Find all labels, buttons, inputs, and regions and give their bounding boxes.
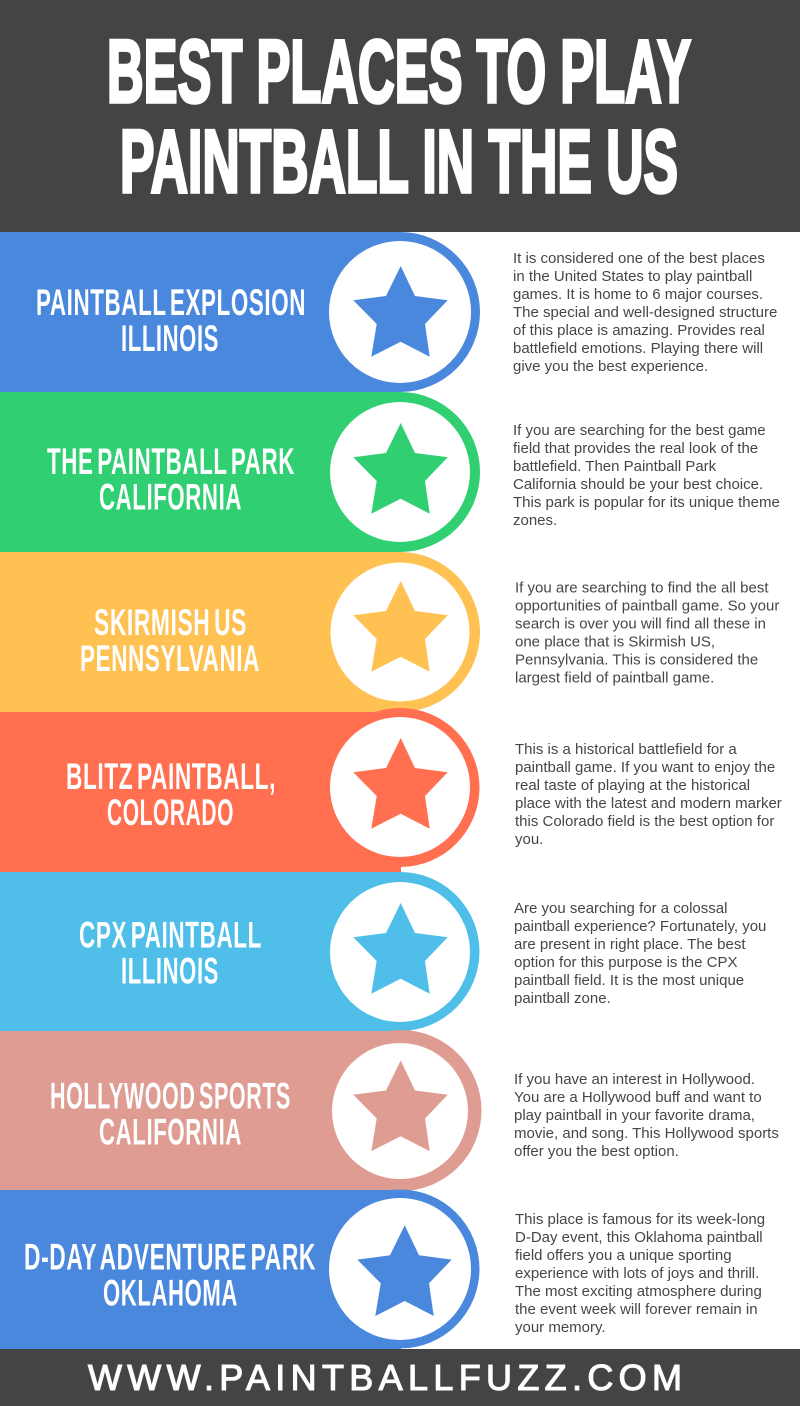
panel: CPX Paintball Illinois: option for this purpose is the CPX [514,954,737,971]
panel: Paintball Explosion Illinois: ILLINOIS [121,318,219,359]
panel: Hollywood Sports California: offer you the best option. [514,1143,679,1160]
panel: The Paintball Park California: THE PAINTBALL PARK [47,441,295,482]
panel: Skirmish US Pennsylvania [0,552,779,712]
panel: Skirmish US Pennsylvania: one place that is Skirmish US, [515,634,715,650]
panel: Skirmish US Pennsylvania: SKIRMISH US [94,602,247,643]
panel: CPX Paintball Illinois: are present in right place. The best [514,936,746,953]
panel: CPX Paintball Illinois [0,872,766,1031]
panel: Skirmish US Pennsylvania: Pennsylvania. This is considered the [515,652,758,668]
panel: Skirmish US Pennsylvania: opportunities of paintball game. So your [515,598,779,614]
panel: D-Day Adventure Park Oklahoma: experience with lots of joys and thrill. [515,1265,759,1282]
panel: D-Day Adventure Park Oklahoma: D-Day event, this Oklahoma paintball [515,1229,763,1246]
panel: Paintball Explosion Illinois: games. It is home to 6 major courses. [513,286,763,303]
panel: CPX Paintball Illinois: paintball field. It is the most unique [514,972,744,989]
panel: D-Day Adventure Park Oklahoma: field offers you a unique sporting [515,1247,732,1264]
panel: The Paintball Park California: field that provides the real look of the [513,440,758,457]
panel: Paintball Explosion Illinois: PAINTBALL EXPLOSION [36,282,306,323]
panel: Blitz Paintball Colorado: real taste of playing at the historical [515,777,750,794]
title banner [0,0,800,232]
panel: D-Day Adventure Park Oklahoma: D-DAY ADVENTURE PARK [24,1236,316,1278]
panel: Paintball Explosion Illinois: give you the best experience. [513,358,708,375]
panel: Blitz Paintball Colorado: COLORADO [107,792,234,833]
panel: D-Day Adventure Park Oklahoma: The most exciting atmosphere during [515,1283,762,1300]
panel: Skirmish US Pennsylvania: PENNSYLVANIA [80,638,260,679]
panel: Paintball Explosion Illinois: It is considered one of the best places [513,250,765,267]
footer: website URL: WWW.PAINTBALLFUZZ.COM [88,1357,682,1398]
panel: Blitz Paintball Colorado: paintball game. If you want to enjoy the [515,759,775,776]
panel: CPX Paintball Illinois: ILLINOIS [121,950,219,992]
panel: Paintball Explosion Illinois: The special and well-designed structure [513,304,777,321]
panel: D-Day Adventure Park Oklahoma [0,1190,765,1349]
panel: Hollywood Sports California: HOLLYWOOD SPORTS [50,1076,291,1116]
panel: CPX Paintball Illinois: CPX PAINTBALL [79,914,262,956]
panel: Paintball Explosion Illinois: of this place is amazing. Provides real [513,322,765,339]
panel: Blitz Paintball Colorado: BLITZ PAINTBALL, [66,756,276,797]
panel: The Paintball Park California: California should be your best choice. [513,476,763,493]
panel: Paintball Explosion Illinois: battlefield emotions. Playing there will [513,340,763,357]
panel: Hollywood Sports California: movie, and song. This Hollywood sports [514,1125,779,1142]
panel: Hollywood Sports California: You are a Hollywood buff and want to [514,1089,762,1106]
panel: CPX Paintball Illinois: Are you searching for a colossal [514,900,727,917]
panel: Hollywood Sports California: If you have an interest in Hollywood. [514,1071,755,1088]
panel: Hollywood Sports California: CALIFORNIA [99,1112,242,1152]
panel: Paintball Explosion Illinois [0,232,777,392]
panel: The Paintball Park California: battlefield. Then Paintball Park [513,458,717,475]
panel: D-Day Adventure Park Oklahoma: your memory. [515,1319,606,1336]
footer: website URL [0,1349,800,1406]
panel: Blitz Paintball Colorado: you. [515,831,543,848]
panel: The Paintball Park California: CALIFORNIA [99,476,242,518]
panel: The Paintball Park California [0,392,780,552]
panel: The Paintball Park California: zones. [513,512,557,529]
panel: D-Day Adventure Park Oklahoma: the event week will forever remain in [515,1301,758,1318]
panel: Hollywood Sports California: play paintball in your favorite drama, [514,1107,755,1124]
panel: Blitz Paintball Colorado [0,708,782,872]
panel: The Paintball Park California: If you are searching for the best game [513,422,766,439]
panel: CPX Paintball Illinois: paintball zone. [514,990,611,1007]
panel: Blitz Paintball Colorado: This is a historical battlefield for a [515,741,737,758]
panel: Skirmish US Pennsylvania: largest field of paintball game. [515,670,714,686]
panel: Blitz Paintball Colorado: place with the latest and modern marker [515,795,782,812]
panel: Skirmish US Pennsylvania: search is over you will find all these in [515,616,766,632]
panel: Paintball Explosion Illinois: in the United States to play paintball [513,268,752,285]
panel: D-Day Adventure Park Oklahoma: This place is famous for its week-long [515,1211,765,1228]
panel: The Paintball Park California: This park is popular for its unique theme [513,494,780,511]
panel: D-Day Adventure Park Oklahoma: OKLAHOMA [103,1272,238,1314]
panel: Hollywood Sports California [0,1030,779,1191]
panel: Blitz Paintball Colorado: this Colorado field is the best option for [515,813,774,830]
panel: CPX Paintball Illinois: paintball experience? Fortunately, you [514,918,766,935]
panel: Skirmish US Pennsylvania: If you are searching to find the all best [515,580,769,596]
